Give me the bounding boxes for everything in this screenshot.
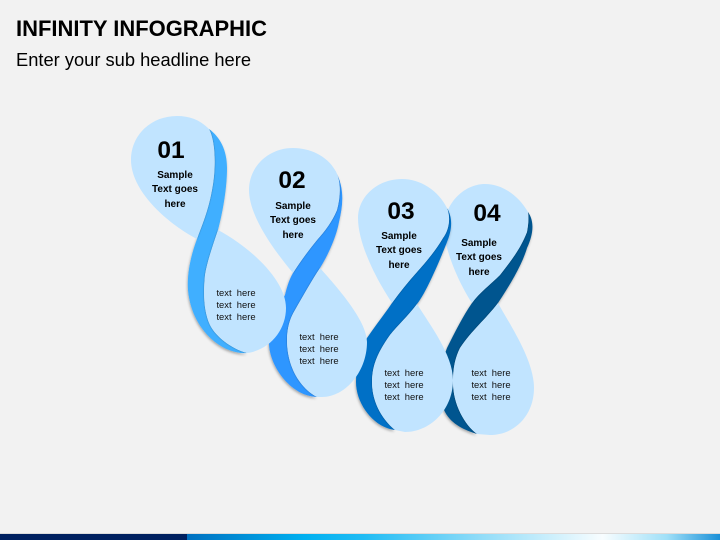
- number 03: 03: [387, 198, 415, 225]
- heading 04: [456, 238, 502, 278]
- heading 02: Sample: [275, 201, 311, 212]
- text block 03: text here: [384, 391, 424, 402]
- number 01: 01: [157, 137, 185, 164]
- subtitle: Enter your sub headline here: [16, 50, 251, 70]
- infinity step 02: [249, 148, 367, 397]
- text block 01: text here: [216, 287, 256, 298]
- infinity step 04: [440, 184, 534, 435]
- ribbon 03: [356, 208, 451, 430]
- ribbon 01: [188, 129, 247, 353]
- text block 02: text here: [299, 355, 339, 366]
- text block 03: text here: [384, 367, 424, 378]
- heading 01: Text goes: [152, 184, 198, 195]
- heading 03: here: [388, 260, 410, 271]
- text block 04: text here: [471, 367, 511, 378]
- lower drop 04: [453, 303, 534, 435]
- heading 01: [152, 170, 198, 210]
- text block 02: text here: [299, 331, 339, 342]
- lower drop 02: [287, 268, 367, 397]
- text block 03: text here: [384, 379, 424, 390]
- text block 02: text here: [299, 343, 339, 354]
- number 04: 04: [473, 200, 501, 227]
- infinity step 01: [131, 116, 286, 353]
- title: INFINITY INFOGRAPHIC: [16, 16, 267, 41]
- heading 03: Sample: [381, 231, 417, 242]
- heading 02: here: [282, 230, 304, 241]
- upper drop 03: [358, 179, 449, 303]
- upper drop 02: [249, 148, 340, 273]
- text block 01: text here: [216, 311, 256, 322]
- ribbon 02: [269, 170, 342, 397]
- upper drop 04: [444, 184, 528, 303]
- upper drop 01: [131, 116, 215, 239]
- text block 02: [299, 331, 339, 366]
- heading 01: here: [164, 199, 186, 210]
- text block 01: text here: [216, 299, 256, 310]
- lower drop 01: [204, 230, 286, 353]
- lower drop 03: [372, 304, 453, 432]
- text block 04: text here: [471, 379, 511, 390]
- number 02: 02: [278, 167, 306, 194]
- heading 04: here: [468, 267, 490, 278]
- heading 01: Sample: [157, 170, 193, 181]
- footer bar: [0, 533, 720, 540]
- heading 04: Sample: [461, 238, 497, 249]
- text block 04: [471, 367, 511, 402]
- text block 04: text here: [471, 391, 511, 402]
- heading 03: Text goes: [376, 245, 422, 256]
- heading 04: Text goes: [456, 252, 502, 263]
- heading 02: Text goes: [270, 215, 316, 226]
- text block 03: [384, 367, 424, 402]
- infinity step 03: [356, 179, 453, 432]
- heading 02: [270, 201, 316, 241]
- ribbon 04: [440, 212, 532, 434]
- heading 03: [376, 231, 422, 271]
- text block 01: [216, 287, 256, 322]
